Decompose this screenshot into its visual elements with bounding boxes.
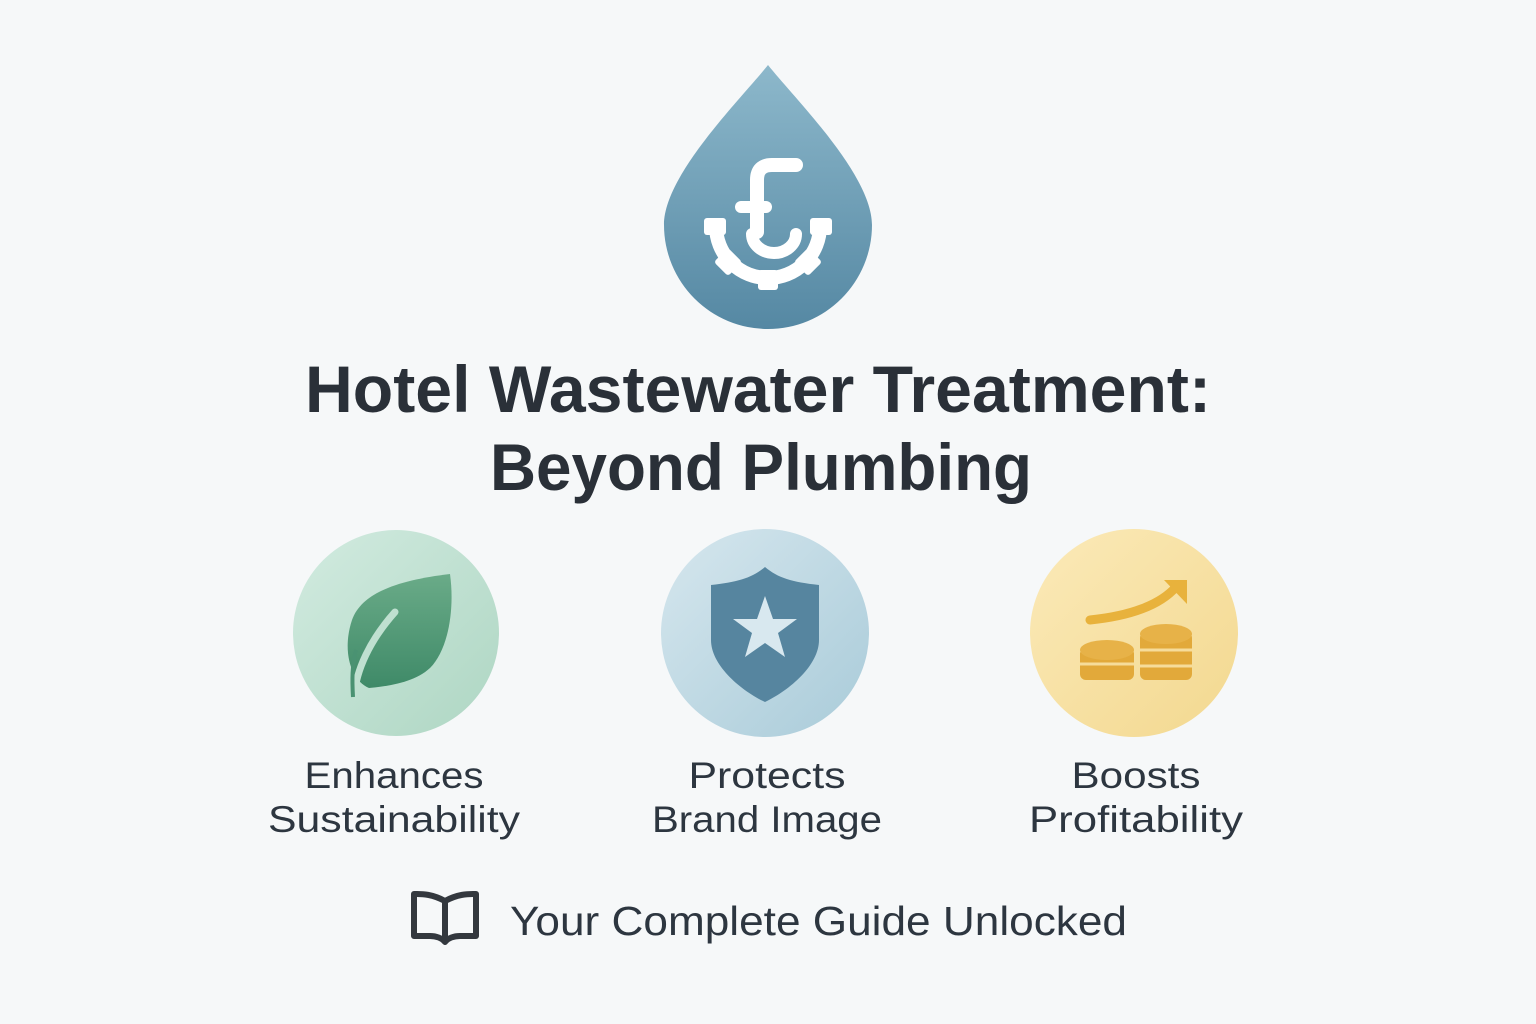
label: Enhances Sustainability <box>268 755 521 840</box>
panel: brand image <box>652 529 882 840</box>
icon: water drop with pound gear <box>664 65 872 329</box>
title: Beyond Plumbing <box>490 430 1032 504</box>
icon: open book <box>414 894 476 942</box>
title: Hotel Wastewater Treatment: <box>305 352 1211 426</box>
label: Enhances Sustainability: Enhances <box>304 755 484 796</box>
label: Boosts Profitability <box>1029 755 1244 840</box>
icon: leaf <box>293 530 499 736</box>
footer: guide <box>414 894 1127 944</box>
label: Enhances Sustainability: Sustainability <box>268 799 521 840</box>
title <box>305 352 1211 504</box>
label: Boosts Profitability: Profitability <box>1029 799 1244 840</box>
label: Boosts Profitability: Boosts <box>1072 755 1200 796</box>
label: Protects Brand Image: Protects <box>688 755 846 796</box>
footer text: Your Complete Guide Unlocked <box>510 898 1127 944</box>
icon: coins with arrow <box>1030 529 1238 737</box>
panel: profitability <box>1029 529 1244 840</box>
icon: shield with star <box>661 529 869 737</box>
label: Protects Brand Image <box>652 755 882 840</box>
panel: sustainability <box>268 530 521 840</box>
label: Protects Brand Image: Brand Image <box>652 799 882 840</box>
